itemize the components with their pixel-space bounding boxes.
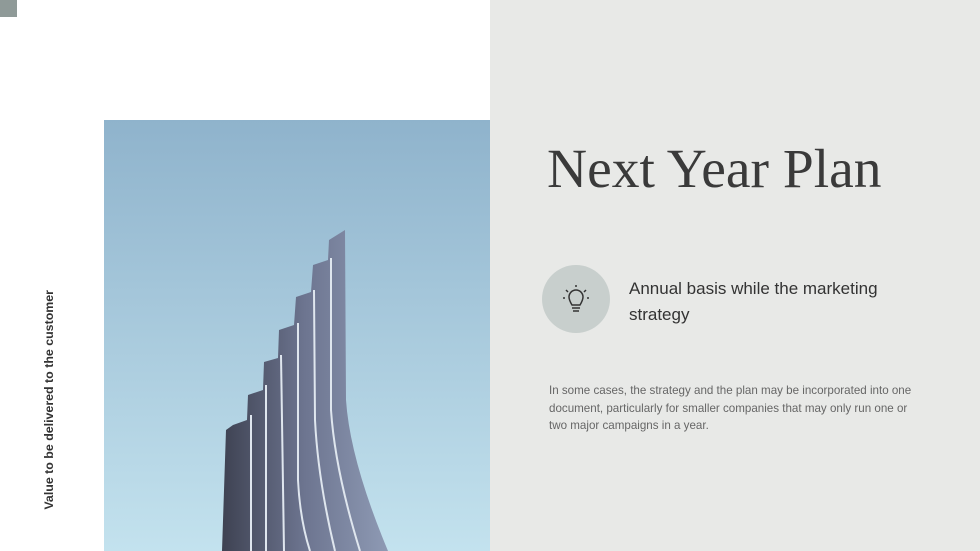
vertical caption: Value to be delivered to the customer (42, 290, 56, 510)
icon: lightbulb circle (542, 265, 610, 333)
photo: building (104, 120, 490, 551)
corner square (0, 0, 17, 17)
right panel (490, 0, 980, 551)
title: Next Year Plan (547, 139, 882, 200)
body text: In some cases, the strategy and the plan may be incorporated into one document, particularly for smaller companies that may only run one or two major campaigns in a year. (549, 384, 911, 432)
subheading: Annual basis while the marketing strategy (629, 279, 878, 324)
